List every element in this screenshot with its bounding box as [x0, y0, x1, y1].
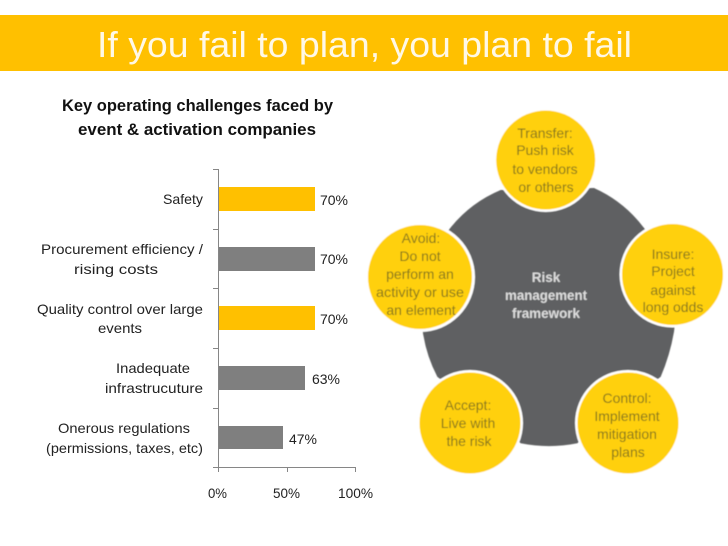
- circle: Control: Control:: [602, 390, 652, 406]
- chart axes: [213, 169, 356, 472]
- bar: Safety 70%: 70%: [320, 192, 348, 208]
- circle: Control: mitigation: [597, 426, 657, 442]
- circle: Transfer: [494, 108, 598, 212]
- bar: Onerous regulations 47%: 47%: [289, 431, 317, 447]
- circle: Transfer: Push risk: [516, 142, 575, 158]
- title banner: If you fail to plan, you plan to fail: [97, 24, 632, 65]
- category labels: Onerous regulations: [58, 420, 190, 436]
- circle: Transfer: or others: [518, 179, 574, 195]
- category labels: (permissions, taxes, etc): [46, 440, 203, 456]
- centre label: framework: [512, 306, 580, 321]
- x-axis labels: 0%: [208, 485, 227, 501]
- bar: Procurement efficiency 70%: [219, 247, 348, 271]
- circle: Transfer: to vendors: [512, 161, 578, 177]
- category labels: Procurement efficiency /: [41, 241, 203, 257]
- chart heading: event & activation companies: [78, 120, 316, 139]
- circle: Transfer: Transfer:: [517, 125, 573, 141]
- circle: Avoid: an element: [386, 302, 456, 318]
- circle: Insure: long odds: [643, 299, 703, 315]
- category labels: events: [98, 320, 142, 336]
- circle: Insure: Project: [651, 263, 695, 279]
- circle: Control: plans: [611, 444, 645, 460]
- bar chart: [37, 169, 373, 501]
- bar: Onerous regulations 47%: [219, 426, 317, 449]
- circle: Avoid: perform an: [386, 266, 454, 282]
- category labels: Quality control over large: [37, 301, 203, 317]
- category labels: [37, 191, 203, 456]
- x-axis labels: [208, 485, 373, 501]
- circle: Accept: Accept:: [445, 397, 491, 413]
- grey shape arcs filling edges: [421, 188, 676, 335]
- x-axis labels: 100%: [338, 485, 373, 501]
- circle: Avoid: Avoid:: [402, 230, 440, 246]
- circle: Accept: the risk: [446, 433, 493, 449]
- category labels: Safety: [163, 191, 203, 207]
- centre label: [505, 270, 587, 321]
- circle: Avoid: Do not: [399, 248, 441, 264]
- circle: Insure: [620, 222, 726, 328]
- bar: Safety 70%: [219, 187, 348, 211]
- bar: Quality control 70%: 70%: [320, 311, 348, 327]
- central grey shape: [423, 188, 674, 446]
- bar: Inadequate infrastructure 63%: [219, 366, 340, 390]
- centre label: Risk: [532, 270, 561, 285]
- circle: Insure: Insure:: [652, 246, 694, 262]
- risk management diagram: [365, 108, 726, 476]
- circle: Accept: [417, 370, 523, 476]
- bar: Quality control 70%: [219, 306, 348, 330]
- category labels: Inadequate: [116, 360, 190, 376]
- title banner: [0, 15, 728, 71]
- x-axis labels: 50%: [273, 485, 300, 501]
- bar: Procurement efficiency 70%: 70%: [320, 251, 348, 267]
- category labels: infrastrucuture: [105, 380, 203, 396]
- centre label: management: [505, 288, 587, 303]
- bar: Inadequate infrastructure 63%: 63%: [312, 371, 340, 387]
- circle: Insure: against: [650, 282, 696, 298]
- circle: Control: Implement: [594, 408, 660, 424]
- category labels: rising costs: [74, 261, 158, 277]
- chart heading: Key operating challenges faced by: [62, 96, 334, 115]
- chart heading: [62, 96, 334, 139]
- circle: Avoid: [365, 222, 475, 332]
- circle: Control: [575, 370, 681, 476]
- circle: Avoid: activity or use: [376, 284, 464, 300]
- circle: Accept: Live with: [441, 415, 495, 431]
